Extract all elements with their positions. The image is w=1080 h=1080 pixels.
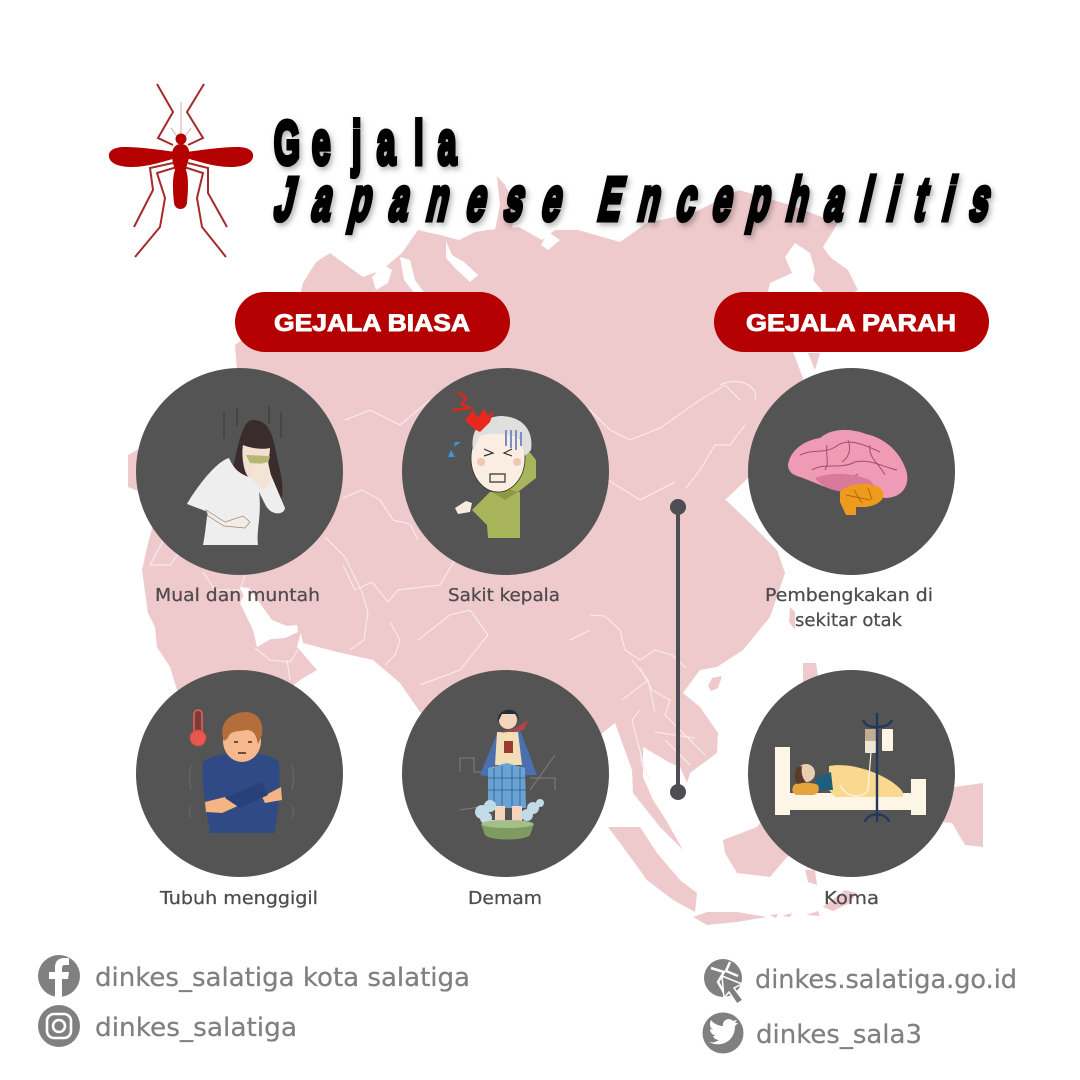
footer: Twitter <box>702 1012 922 1054</box>
label: Koma <box>824 888 879 909</box>
label: sekitar otak <box>795 610 903 631</box>
icon: man with feet in basin <box>460 710 555 840</box>
footer: Instagram: dinkes_salatiga <box>95 1013 297 1043</box>
symptom: Sakit kepala <box>402 368 609 606</box>
symptom: Tubuh menggigil <box>136 670 343 909</box>
footer: Website: dinkes.salatiga.go.id <box>755 965 1017 995</box>
symptom: Mual dan muntah <box>136 368 343 606</box>
map: country borders <box>150 381 756 780</box>
label <box>765 585 933 631</box>
icon: shivering man <box>190 710 294 833</box>
map: Asia background <box>128 176 983 925</box>
label: Mual dan muntah <box>155 585 320 606</box>
label: Pembengkakan di <box>765 585 933 606</box>
symptom: Koma <box>748 670 955 909</box>
icon: Facebook <box>38 955 80 997</box>
label: Sakit kepala <box>448 585 560 606</box>
timeline divider <box>670 499 686 800</box>
footer: Website <box>704 959 1017 1004</box>
title <box>269 109 999 233</box>
label: Demam <box>468 888 542 909</box>
map: inland seas <box>240 232 823 640</box>
title line: Japanese: Japanese <box>269 165 571 233</box>
title line: Encephalitis: Encephalitis <box>593 165 999 233</box>
icon: Twitter <box>702 1012 744 1054</box>
symptom: Pembengkakan di sekitar otak <box>748 368 955 631</box>
footer: Facebook: dinkes_salatiga kota salatiga <box>95 963 470 993</box>
icon: Instagram <box>38 1005 80 1047</box>
icon: nauseous woman <box>187 406 285 545</box>
pill: Gejala Biasa: GEJALA BIASA <box>274 310 470 337</box>
symptom: Demam <box>402 670 609 909</box>
icon: patient in hospital bed <box>775 713 926 822</box>
pill: Gejala Biasa <box>235 292 510 352</box>
icon: globe with cursor <box>704 959 743 1004</box>
pill: Gejala Parah <box>714 292 989 352</box>
label: Tubuh menggigil <box>159 888 318 909</box>
title line: Gejala: Gejala <box>274 109 457 178</box>
footer: Facebook <box>38 955 470 997</box>
icon: brain <box>788 430 907 515</box>
footer: Instagram <box>38 1005 297 1047</box>
footer: Twitter: dinkes_sala3 <box>756 1020 922 1050</box>
mosquito icon <box>109 84 253 257</box>
icon: man with headache <box>448 392 536 538</box>
pill: Gejala Parah: GEJALA PARAH <box>746 310 956 337</box>
